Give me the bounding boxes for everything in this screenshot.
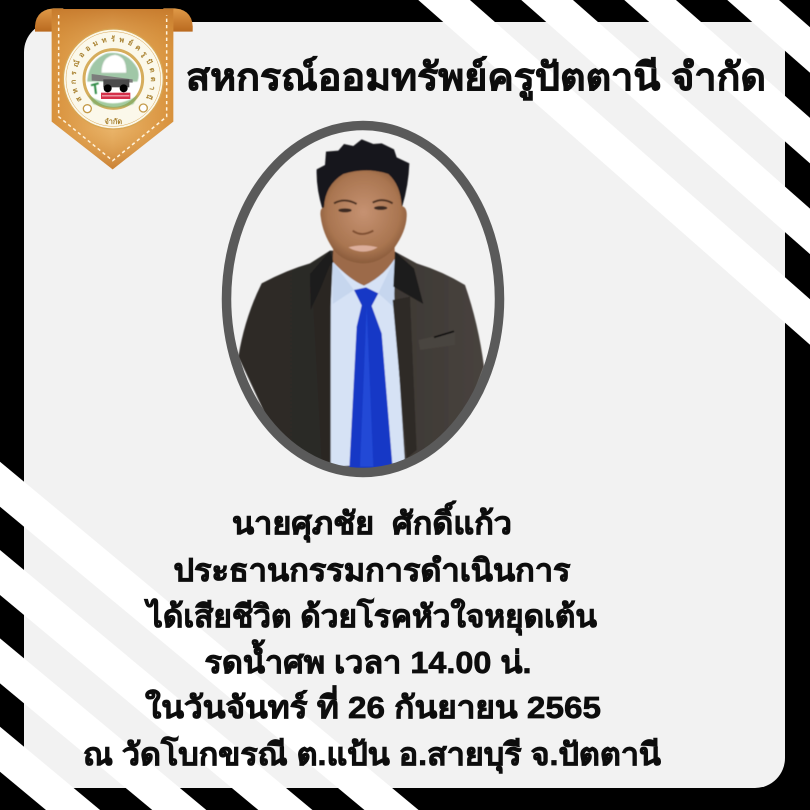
seal small emblems [83,104,147,113]
name: นายศุภชัย ศักดิ์แก้ว [232,500,512,543]
shirt collar [333,258,395,307]
title: สหกรณ์ออมทรัพย์ครูปัตตานี จำกัด [186,56,766,101]
portrait figure [238,139,484,480]
ribbon body [52,9,173,169]
announcement text [83,500,661,774]
ribbon stitching [59,15,167,161]
seal green scene [87,53,139,108]
ribbon badge with cooperative seal [34,8,193,170]
tie [349,287,393,468]
seal arc text: สหกรณ์ออมทรัพย์ครูปัตตานี [72,35,156,102]
nose and mouth [353,231,373,234]
seal [62,28,164,130]
seal cannon [92,74,133,99]
jacket [238,251,484,480]
collars and lapels [310,251,333,310]
ceremony time: รดน้ำศพ เวลา 14.00 น่. [204,639,532,680]
jacket pocket [419,334,447,349]
ribbon fold [35,8,193,32]
cause of death: ได้เสียชีวิต ด้วยโรคหัวใจหยุดเต้น [144,598,597,636]
portrait oval frame [226,126,500,472]
seal bottom text: จำกัด [105,117,122,126]
white diagonal stripes, bottom left [0,453,443,810]
shirt [330,258,405,467]
face [320,170,407,263]
ceremony location: ณ วัดโบกขรณี ต.แป้น อ.สายบุรี จ.ปัตตานี [83,736,661,774]
white diagonal stripes, top right [407,0,810,362]
neck [332,247,396,286]
hair [317,139,409,210]
eyes and brows [334,200,393,204]
position: ประธานกรรมการดำเนินการ [174,553,571,588]
ceremony date: ในวันจันทร์ ที่ 26 กันยายน 2565 [145,685,601,725]
